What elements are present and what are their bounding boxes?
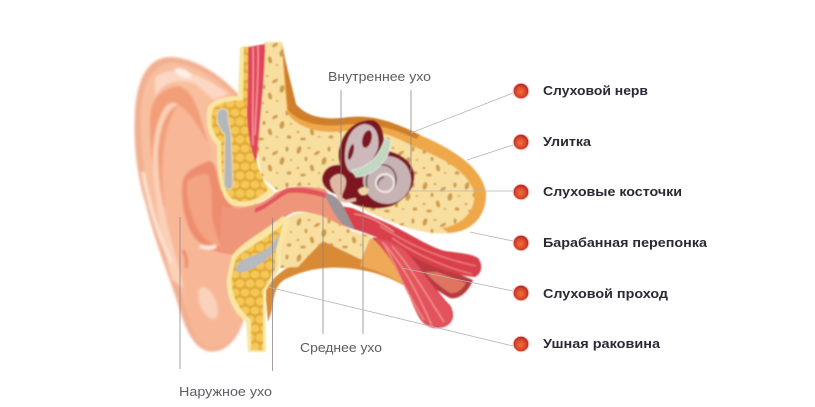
muscle strip top	[247, 44, 265, 161]
label: outer ear: Наружное ухо	[179, 385, 272, 399]
pointer lines	[180, 90, 411, 371]
auditory canal	[220, 186, 356, 254]
legend marker: auditory canal	[513, 285, 529, 301]
upper cartilage	[207, 46, 275, 207]
legend marker: cochlea	[513, 134, 529, 150]
outer ear: auricle	[134, 57, 275, 352]
legend marker: auditory nerve	[513, 83, 529, 99]
legend label: auditory canal: Слуховой проход	[543, 287, 668, 301]
anatomical ear illustration	[207, 42, 486, 352]
legend marker: eardrum	[513, 235, 529, 251]
label: inner ear: Внутреннее ухо	[328, 70, 431, 84]
legend label: cochlea: Улитка	[543, 135, 592, 149]
bone underside	[266, 238, 425, 322]
lower cartilage	[227, 216, 290, 352]
legend label: auricle: Ушная раковина	[543, 337, 661, 351]
legend label: auditory nerve: Слуховой нерв	[543, 84, 648, 98]
label: middle ear: Среднее ухо	[300, 341, 382, 355]
legend marker: auricle	[513, 336, 529, 352]
upper muscle tube	[340, 206, 481, 298]
eardrum	[325, 193, 355, 230]
large temporal bone	[257, 42, 486, 233]
large muscle	[373, 238, 452, 328]
lower bone segment	[280, 213, 372, 268]
legend label: eardrum: Барабанная перепонка	[543, 236, 708, 250]
connector lines	[268, 93, 513, 346]
legend label: ossicles: Слуховые косточки	[543, 185, 682, 199]
inner ear	[322, 120, 414, 208]
legend marker: ossicles	[513, 184, 529, 200]
